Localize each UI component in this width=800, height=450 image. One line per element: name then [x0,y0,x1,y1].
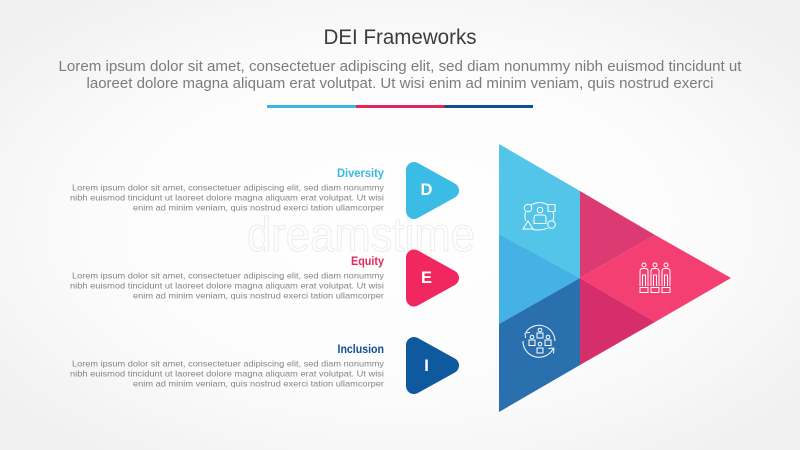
tri-colour divider [267,105,533,108]
badge: D [414,170,451,211]
segmented triangle diagram [499,144,731,412]
subtitle text [58,59,742,92]
text: dreamstime [247,209,475,262]
text block: Equity [70,270,385,300]
text block: Diversity: Lorem ipsum dolor sit amet, consectetuer adipiscing elit, sed diam nonummy [72,182,385,192]
text block: Diversity: enim ad minim veniam, quis nostrud exerci tation ullamcorper [133,202,384,212]
icon: inclusion circle of people [523,325,555,357]
text block: Inclusion [70,358,385,388]
icon: three standing people [640,263,670,292]
title: DEI Frameworks [324,26,476,49]
badge: D: D [421,181,433,199]
heading: Inclusion: Inclusion [338,344,384,356]
badge: I: I [424,357,429,375]
text block: Inclusion: nibh euismod tincidunt ut laoreet dolore magna aliquam erat volutpat. Ut wisi [70,368,384,378]
item: Inclusion [70,344,451,388]
text block: Inclusion: Lorem ipsum dolor sit amet, consectetuer adipiscing elit, sed diam nonummy [72,358,385,368]
badge: I [414,345,451,386]
text block: Equity: nibh euismod tincidunt ut laoreet dolore magna aliquam erat volutpat. Ut wisi [70,280,384,290]
badge: E [414,258,451,298]
badge: E: E [421,269,432,287]
text block: Equity: Lorem ipsum dolor sit amet, consectetuer adipiscing elit, sed diam nonummy [72,270,385,280]
text block: Inclusion: enim ad minim veniam, quis nostrud exerci tation ullamcorper [133,378,384,388]
subtitle text: laoreet dolore magna aliquam erat volutpat. Ut wisi enim ad minim veniam, quis nostrud exerci [86,76,714,92]
text block: Equity: enim ad minim veniam, quis nostrud exerci tation ullamcorper [133,290,384,300]
item: Equity [70,256,451,300]
text block: Diversity [70,182,385,212]
subtitle text: Lorem ipsum dolor sit amet, consectetuer adipiscing elit, sed diam nonummy nibh euismod tincidunt ut [58,59,742,75]
icon: diversity people and shapes [523,202,555,230]
heading: Equity: Equity [351,256,385,268]
heading: Diversity: Diversity [337,168,385,180]
text block: Diversity: nibh euismod tincidunt ut laoreet dolore magna aliquam erat volutpat. Ut wisi [70,192,384,202]
item: Diversity [70,168,451,212]
